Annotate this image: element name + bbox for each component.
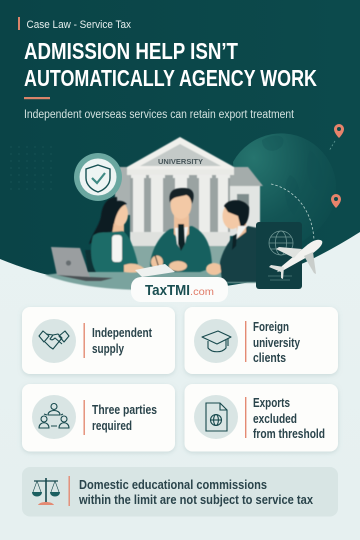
meeting table (45, 269, 262, 290)
globe (233, 133, 336, 256)
label: university (253, 336, 300, 350)
label (253, 320, 300, 365)
logo pill: TaxTMI (145, 283, 190, 299)
centre man (150, 188, 212, 272)
passport (256, 222, 302, 289)
callout text: Domestic educational commissions (79, 478, 267, 492)
label (253, 396, 325, 441)
label: required (92, 419, 132, 433)
logo pill (131, 277, 228, 302)
university building (115, 137, 263, 274)
columns (131, 174, 230, 233)
label: supply (92, 342, 124, 356)
title: ADMISSION HELP ISN’T (24, 38, 239, 64)
logo pill: .com (190, 286, 214, 298)
right wing (226, 167, 263, 186)
decorative dot grid (10, 146, 52, 190)
woman (85, 197, 146, 273)
icon: graduation cap (194, 319, 238, 363)
left wing (115, 167, 130, 215)
icon: handshake (32, 319, 76, 363)
label: Three parties (92, 403, 157, 417)
icon: three people (32, 395, 76, 439)
hall back wall (130, 175, 230, 233)
contract paper (135, 264, 175, 277)
title (24, 38, 317, 91)
airplane (269, 240, 322, 279)
callout text: within the limit are not subject to service tax (78, 493, 313, 507)
callout text (78, 478, 313, 507)
label: Exports (253, 396, 290, 410)
laptop (51, 247, 113, 281)
label (92, 403, 157, 433)
icon: scales of justice (32, 478, 60, 505)
header tag: Case Law - Service Tax (26, 19, 131, 31)
header background curve (0, 0, 360, 290)
card: exports excluded from threshold (184, 384, 338, 452)
pediment (127, 137, 234, 170)
label (92, 326, 153, 356)
label: Independent (92, 326, 153, 340)
shield badge (74, 153, 122, 201)
card: three parties required (22, 384, 175, 452)
right man (206, 200, 258, 282)
subtitle: Independent overseas services can retain export treatment (24, 109, 295, 121)
map pins and flight path (271, 124, 344, 240)
callout: domestic commissions (22, 467, 338, 516)
card: foreign university clients (184, 307, 338, 374)
label: from threshold (253, 427, 325, 441)
icon: document with globe (194, 395, 238, 439)
university label: UNIVERSITY (158, 159, 203, 166)
label: clients (253, 351, 286, 365)
label: excluded (253, 412, 297, 426)
floor behind people (125, 246, 262, 274)
label: Foreign (253, 320, 289, 334)
title accent line (24, 97, 50, 99)
card: independent supply (22, 307, 175, 374)
steps (130, 232, 230, 246)
